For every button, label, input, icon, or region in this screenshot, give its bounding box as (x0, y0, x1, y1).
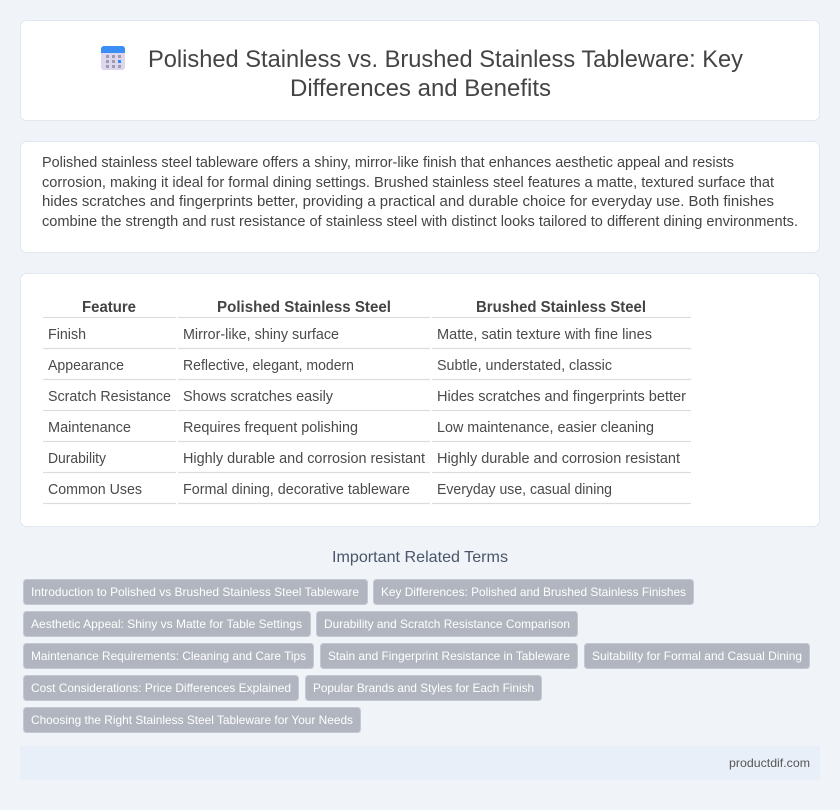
description text: combine the strength and rust resistance of stainless steel with distinct looks tailored to different dining environments. (42, 214, 798, 230)
row: durability: Highly durable and corrosion resistant (437, 451, 680, 467)
row: common uses: Common Uses (48, 482, 142, 498)
panel: description (20, 142, 820, 252)
row: finish: Mirror-like, shiny surface (183, 327, 339, 343)
row: maintenance (48, 420, 654, 436)
description text: Polished stainless steel tableware offers a shiny, mirror-like finish that enhances aesthetic appeal and resists (42, 155, 734, 171)
heading: related terms: Important Related Terms (332, 549, 508, 566)
related term tags: Durability and Scratch Resistance Comparison (324, 617, 570, 631)
footer: productdif.com (729, 756, 810, 770)
row: scratch resistance: Hides scratches and fingerprints better (437, 389, 686, 405)
row: scratch resistance (48, 389, 686, 405)
row: durability: Durability (48, 451, 107, 467)
related term tags: Maintenance Requirements: Cleaning and Care Tips (31, 649, 306, 663)
row: appearance (48, 358, 612, 374)
title: Polished Stainless vs. Brushed Stainless Tableware: Key (148, 46, 743, 73)
related term tags: Introduction to Polished vs Brushed Stainless Steel Tableware (31, 585, 359, 599)
row: scratch resistance: Scratch Resistance (48, 389, 171, 405)
row: common uses (48, 482, 612, 498)
table header: Feature (82, 299, 136, 316)
row: finish: Matte, satin texture with fine lines (437, 327, 652, 343)
row: common uses: Everyday use, casual dining (437, 482, 612, 498)
table header (82, 299, 646, 316)
row: appearance: Appearance (48, 358, 124, 374)
row: common uses: Formal dining, decorative tableware (183, 482, 410, 498)
row: finish: Finish (48, 327, 86, 343)
related term tags: Key Differences: Polished and Brushed Stainless Finishes (381, 585, 686, 599)
description text: corrosion, making it ideal for formal dining settings. Brushed stainless steel features a matte, textured surface that (42, 175, 774, 191)
row: maintenance: Requires frequent polishing (183, 420, 358, 436)
related term tags: Suitability for Formal and Casual Dining (592, 649, 802, 663)
row: finish (48, 327, 652, 343)
related term tags: Popular Brands and Styles for Each Finish (313, 681, 534, 695)
related term tags: Aesthetic Appeal: Shiny vs Matte for Table Settings (31, 617, 302, 631)
row: scratch resistance: Shows scratches easily (183, 389, 334, 405)
table header: Brushed Stainless Steel (476, 299, 646, 316)
related term tags (24, 580, 810, 732)
related term tags: Cost Considerations: Price Differences Explained (31, 681, 291, 695)
title (148, 46, 743, 102)
panel: comparison table (20, 274, 820, 526)
row: durability (48, 451, 680, 467)
related term tags: Stain and Fingerprint Resistance in Tableware (328, 649, 570, 663)
row: appearance: Reflective, elegant, modern (183, 358, 354, 374)
footer (20, 746, 820, 780)
row: durability: Highly durable and corrosion resistant (183, 451, 425, 467)
title: Differences and Benefits (290, 75, 551, 102)
row: maintenance: Maintenance (48, 420, 131, 436)
related term tags: Choosing the Right Stainless Steel Tableware for Your Needs (31, 713, 353, 727)
row: maintenance: Low maintenance, easier cleaning (437, 420, 654, 436)
table header: Polished Stainless Steel (217, 299, 391, 316)
description text (42, 155, 798, 230)
panel: header (20, 20, 820, 120)
row: appearance: Subtle, understated, classic (437, 358, 612, 374)
description text: hides scratches and fingerprints better, providing a practical and durable choice for everyday use. Both finishes (42, 194, 774, 210)
icon: calendar (101, 46, 125, 70)
